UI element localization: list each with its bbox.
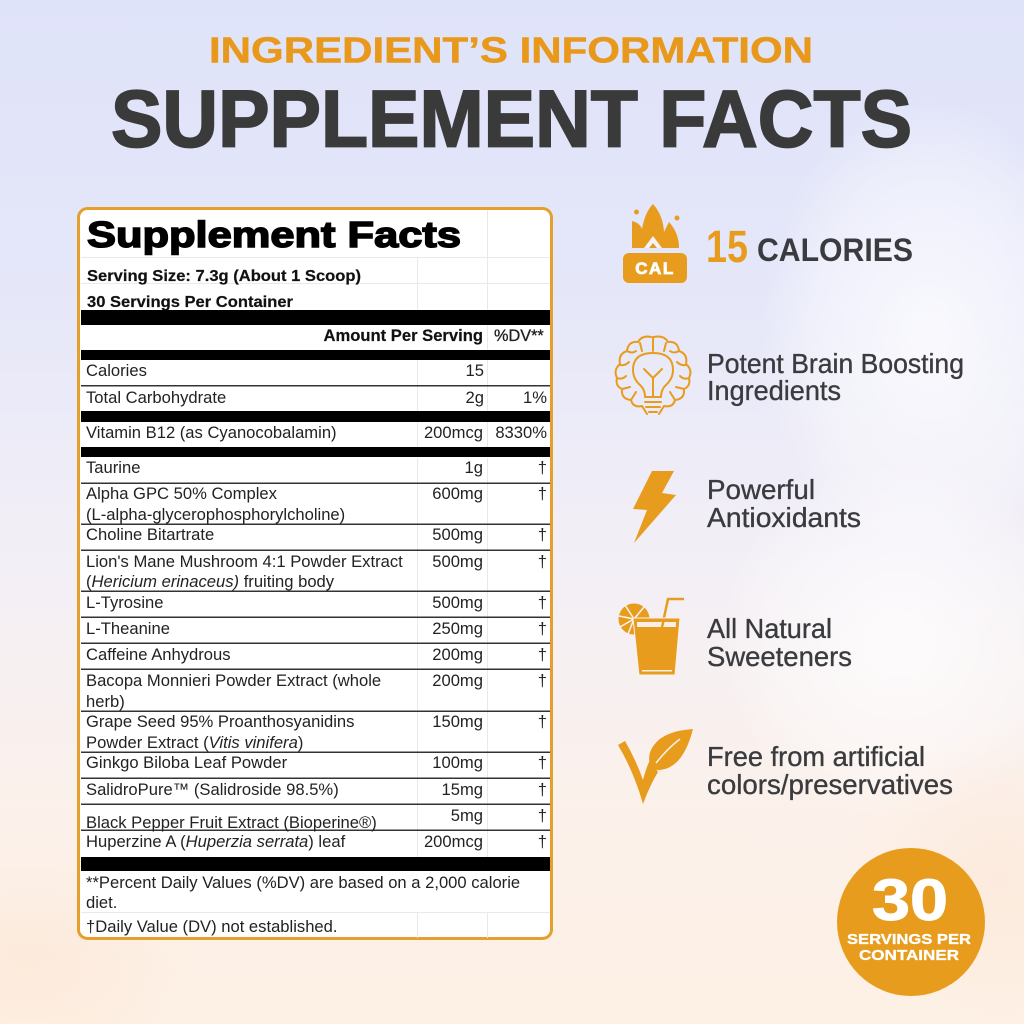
badge: 30 servings: CONTAINER bbox=[859, 948, 960, 964]
calories label: CALORIES bbox=[757, 232, 913, 268]
rows: ingredient list: † bbox=[538, 619, 547, 638]
rows: ingredient list: † bbox=[538, 806, 547, 825]
main title: SUPPLEMENT FACTS bbox=[111, 74, 912, 164]
serving info bbox=[87, 268, 361, 311]
row: vitamin B12: 200mcg bbox=[424, 423, 483, 442]
icon: brain with light bulb bbox=[616, 337, 690, 414]
rows: ingredient list: † bbox=[538, 671, 547, 690]
row: vitamin B12 bbox=[86, 423, 547, 442]
rows: ingredient list: 250mg bbox=[432, 619, 483, 638]
sweeteners label: Sweeteners bbox=[707, 641, 852, 672]
sweeteners label: All Natural bbox=[707, 613, 832, 644]
rows: ingredient list: L-Tyrosine bbox=[86, 593, 163, 612]
rows: ingredient list: 1g bbox=[465, 458, 483, 477]
footnotes bbox=[86, 873, 520, 936]
sweeteners label bbox=[707, 613, 852, 672]
rows: ingredient list: 150mg bbox=[432, 712, 483, 731]
rows: ingredient list: † bbox=[538, 552, 547, 571]
icon: lightning bolt bbox=[633, 471, 676, 543]
row: vitamin B12: Vitamin B12 (as Cyanocobalamin) bbox=[86, 423, 337, 442]
rows: ingredient list: (L-alpha-glycerophosphorylcholine) bbox=[86, 505, 345, 524]
badge: 30 servings: SERVINGS PER bbox=[847, 932, 972, 948]
rows: ingredient list: Powder Extract (Vitis vinifera) bbox=[86, 733, 303, 752]
rows: ingredient list: 200mg bbox=[432, 645, 483, 664]
rows: ingredient list: herb) bbox=[86, 692, 125, 711]
rows: ingredient list: † bbox=[538, 712, 547, 731]
artificial free label: Free from artificial bbox=[707, 741, 925, 772]
rows: ingredient list: Ginkgo Biloba Leaf Powder bbox=[86, 753, 288, 772]
table title: Supplement Facts bbox=[87, 214, 461, 255]
calories label bbox=[706, 221, 913, 272]
rows: ingredient list: † bbox=[538, 593, 547, 612]
icon: vegan leaf check bbox=[618, 729, 693, 804]
rows: calories and carbohydrate: 15 bbox=[466, 361, 484, 380]
panel: supplement facts table bbox=[78, 208, 552, 938]
rows: ingredient list: L-Theanine bbox=[86, 619, 170, 638]
column headers: Amount Per Serving bbox=[323, 326, 483, 345]
rows: ingredient list: 600mg bbox=[432, 484, 483, 503]
footnotes: †Daily Value (DV) not established. bbox=[86, 917, 338, 936]
rows: ingredient list: 100mg bbox=[432, 753, 483, 772]
rows: ingredient list: † bbox=[538, 458, 547, 477]
rows: ingredient list: Grape Seed 95% Proanthosyanidins bbox=[86, 712, 354, 731]
rows: ingredient list bbox=[86, 458, 547, 851]
serving info: 30 Servings Per Container bbox=[87, 294, 293, 311]
rows: ingredient list: Taurine bbox=[86, 458, 140, 477]
rows: ingredient list: SalidroPure™ (Salidroside 98.5%) bbox=[86, 780, 339, 799]
column headers: %DV** bbox=[494, 327, 544, 345]
rows: ingredient list: † bbox=[538, 645, 547, 664]
antioxidants label: Powerful bbox=[707, 474, 815, 505]
rows: calories and carbohydrate: Calories bbox=[86, 361, 147, 380]
rows: ingredient list: † bbox=[538, 525, 547, 544]
antioxidants label: Antioxidants bbox=[707, 502, 861, 533]
eyebrow heading: INGREDIENT’S INFORMATION bbox=[209, 30, 813, 70]
icon: calories flame bbox=[623, 204, 687, 283]
brain label: Ingredients bbox=[707, 375, 841, 406]
artificial free label: colors/preservatives bbox=[707, 769, 953, 800]
rows: ingredient list: Bacopa Monnieri Powder Extract (whole bbox=[86, 671, 381, 690]
row: vitamin B12: 8330% bbox=[495, 423, 547, 442]
rows: ingredient list: Huperzine A (Huperzia serrata) leaf bbox=[86, 832, 346, 851]
rows: calories and carbohydrate: Total Carbohydrate bbox=[86, 388, 226, 407]
rows: ingredient list: Lion's Mane Mushroom 4:1 Powder Extract bbox=[86, 552, 403, 571]
badge: 30 servings: 30 bbox=[872, 868, 948, 933]
rows: ingredient list: † bbox=[538, 753, 547, 772]
icon: juice glass with orange slice bbox=[618, 599, 684, 675]
rows: ingredient list: 200mg bbox=[432, 671, 483, 690]
rows: ingredient list: † bbox=[538, 832, 547, 851]
rows: ingredient list: 15mg bbox=[441, 780, 483, 799]
badge: 30 servings bbox=[837, 848, 985, 996]
footnotes: **Percent Daily Values (%DV) are based on a 2,000 calorie bbox=[86, 873, 520, 892]
rows: ingredient list: 200mcg bbox=[424, 832, 483, 851]
rows: ingredient list: (Hericium erinaceus) fruiting body bbox=[86, 572, 335, 591]
antioxidants label bbox=[707, 474, 861, 533]
serving info: Serving Size: 7.3g (About 1 Scoop) bbox=[87, 268, 361, 285]
rows: ingredient list: 5mg bbox=[451, 806, 483, 825]
rows: calories and carbohydrate: 2g bbox=[466, 388, 484, 407]
rows: calories and carbohydrate bbox=[86, 361, 547, 407]
rows: ingredient list: Alpha GPC 50% Complex bbox=[86, 484, 278, 503]
rows: ingredient list: Choline Bitartrate bbox=[86, 525, 214, 544]
rows: ingredient list: † bbox=[538, 484, 547, 503]
artificial free label bbox=[707, 741, 953, 800]
brain label: Potent Brain Boosting bbox=[707, 348, 964, 379]
rows: calories and carbohydrate: 1% bbox=[523, 388, 547, 407]
rows: ingredient list: Black Pepper Fruit Extract (Bioperine®) bbox=[86, 813, 377, 832]
rows: ingredient list: 500mg bbox=[432, 525, 483, 544]
rows: ingredient list: † bbox=[538, 780, 547, 799]
brain label bbox=[707, 348, 964, 406]
footnotes: diet. bbox=[86, 893, 117, 912]
icon: calories flame: CAL bbox=[635, 259, 675, 278]
calories label: 15 bbox=[706, 221, 748, 272]
rows: ingredient list: Caffeine Anhydrous bbox=[86, 645, 231, 664]
rows: ingredient list: 500mg bbox=[432, 593, 483, 612]
rows: ingredient list: 500mg bbox=[432, 552, 483, 571]
